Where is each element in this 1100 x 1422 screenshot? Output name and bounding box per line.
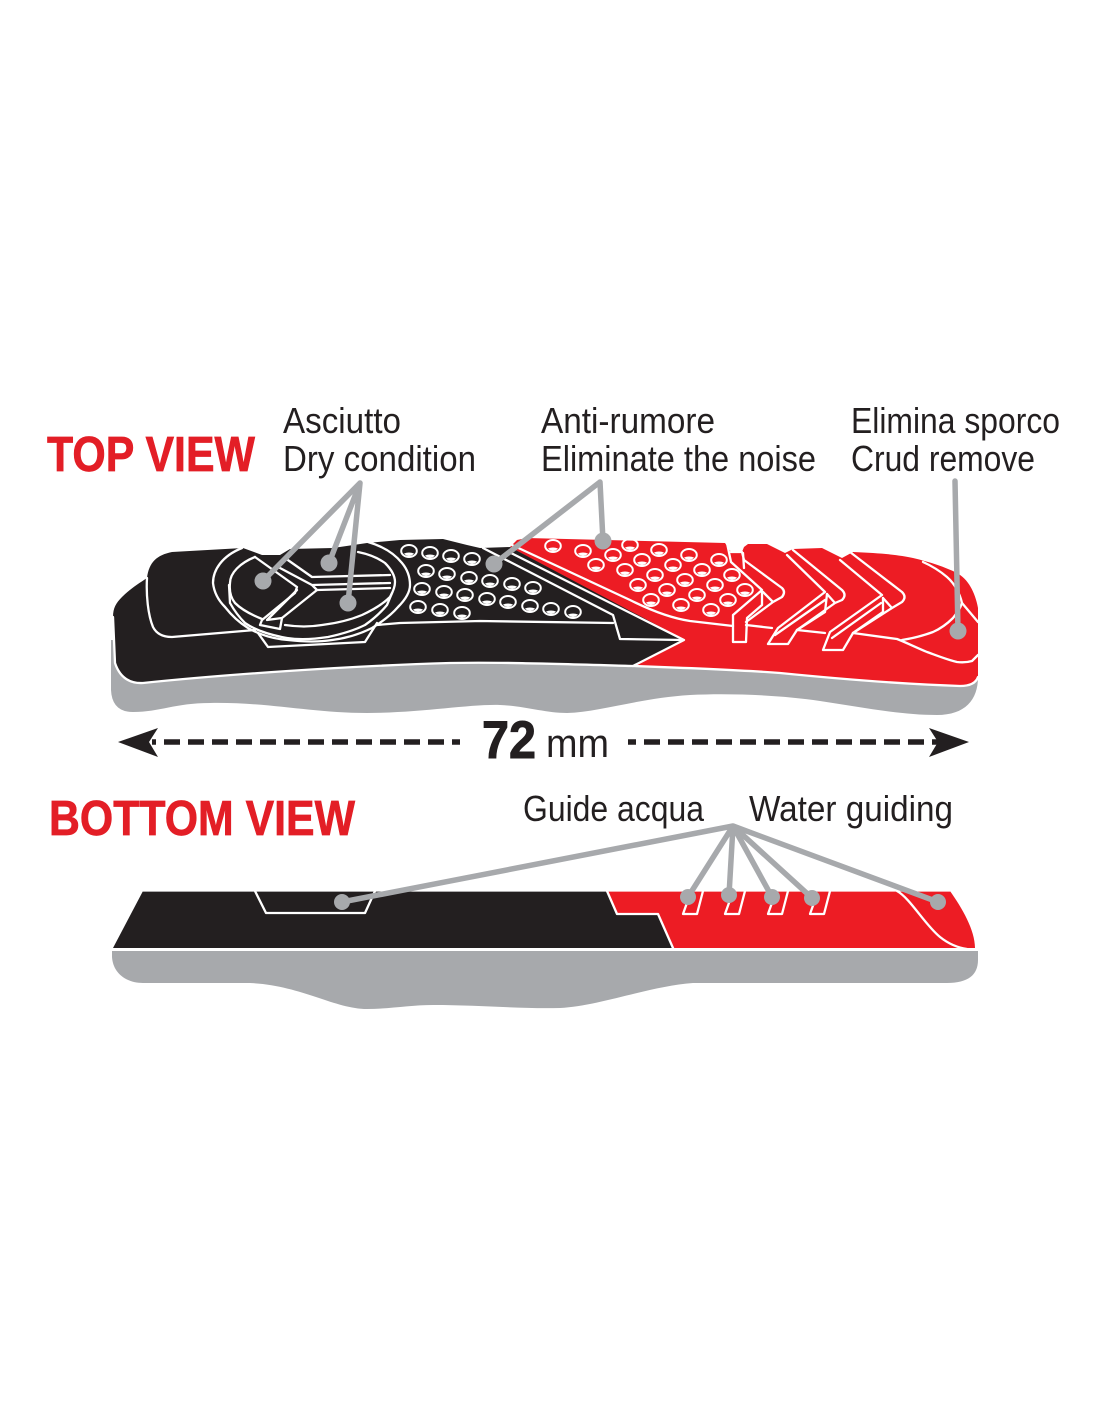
bottom pad black (113, 891, 673, 948)
dimension arrow: 72 mm: mm (546, 722, 609, 766)
label: water guiding: Guide acqua (523, 788, 705, 829)
label: eliminate the noise: Eliminate the noise (541, 438, 816, 479)
leader line: crud remove (950, 481, 966, 640)
heading: top view: TOP VIEW (47, 428, 256, 482)
chevron 1 (727, 543, 762, 642)
pad white outlines (113, 542, 978, 686)
bottom view brake pad (112, 890, 978, 1009)
leader lines: dry condition (254, 483, 360, 612)
label: eliminate the noise (541, 400, 816, 479)
leader lines: water guiding (334, 826, 946, 910)
label: dry condition (283, 400, 476, 479)
leader lines: noise (486, 482, 612, 572)
textured holes on black (401, 545, 581, 619)
chevron 2 (768, 555, 827, 644)
dimension arrow: 72 mm (118, 711, 969, 770)
bottom pad red (607, 891, 975, 948)
label: dry condition: Dry condition (283, 438, 476, 479)
label: crud remove: Crud remove (851, 438, 1035, 479)
pad black section (113, 539, 685, 683)
pad red section (510, 538, 978, 686)
label: water guiding (523, 788, 953, 829)
pad shadow side (111, 640, 978, 715)
textured holes on red (545, 539, 753, 616)
top view brake pad (111, 538, 978, 715)
heading: bottom view: BOTTOM VIEW (49, 792, 356, 846)
chevron 3 (823, 560, 883, 650)
label: crud remove (851, 400, 1060, 479)
label: water guiding: Water guiding (749, 788, 953, 829)
bottom pad shadow (112, 951, 978, 1009)
dimension arrow: 72 mm: 72 (482, 711, 536, 770)
label: crud remove: Elimina sporco (851, 400, 1060, 441)
bottom pad white outlines (112, 890, 978, 950)
label: dry condition: Asciutto (283, 400, 401, 441)
label: eliminate the noise: Anti-rumore (541, 400, 715, 441)
